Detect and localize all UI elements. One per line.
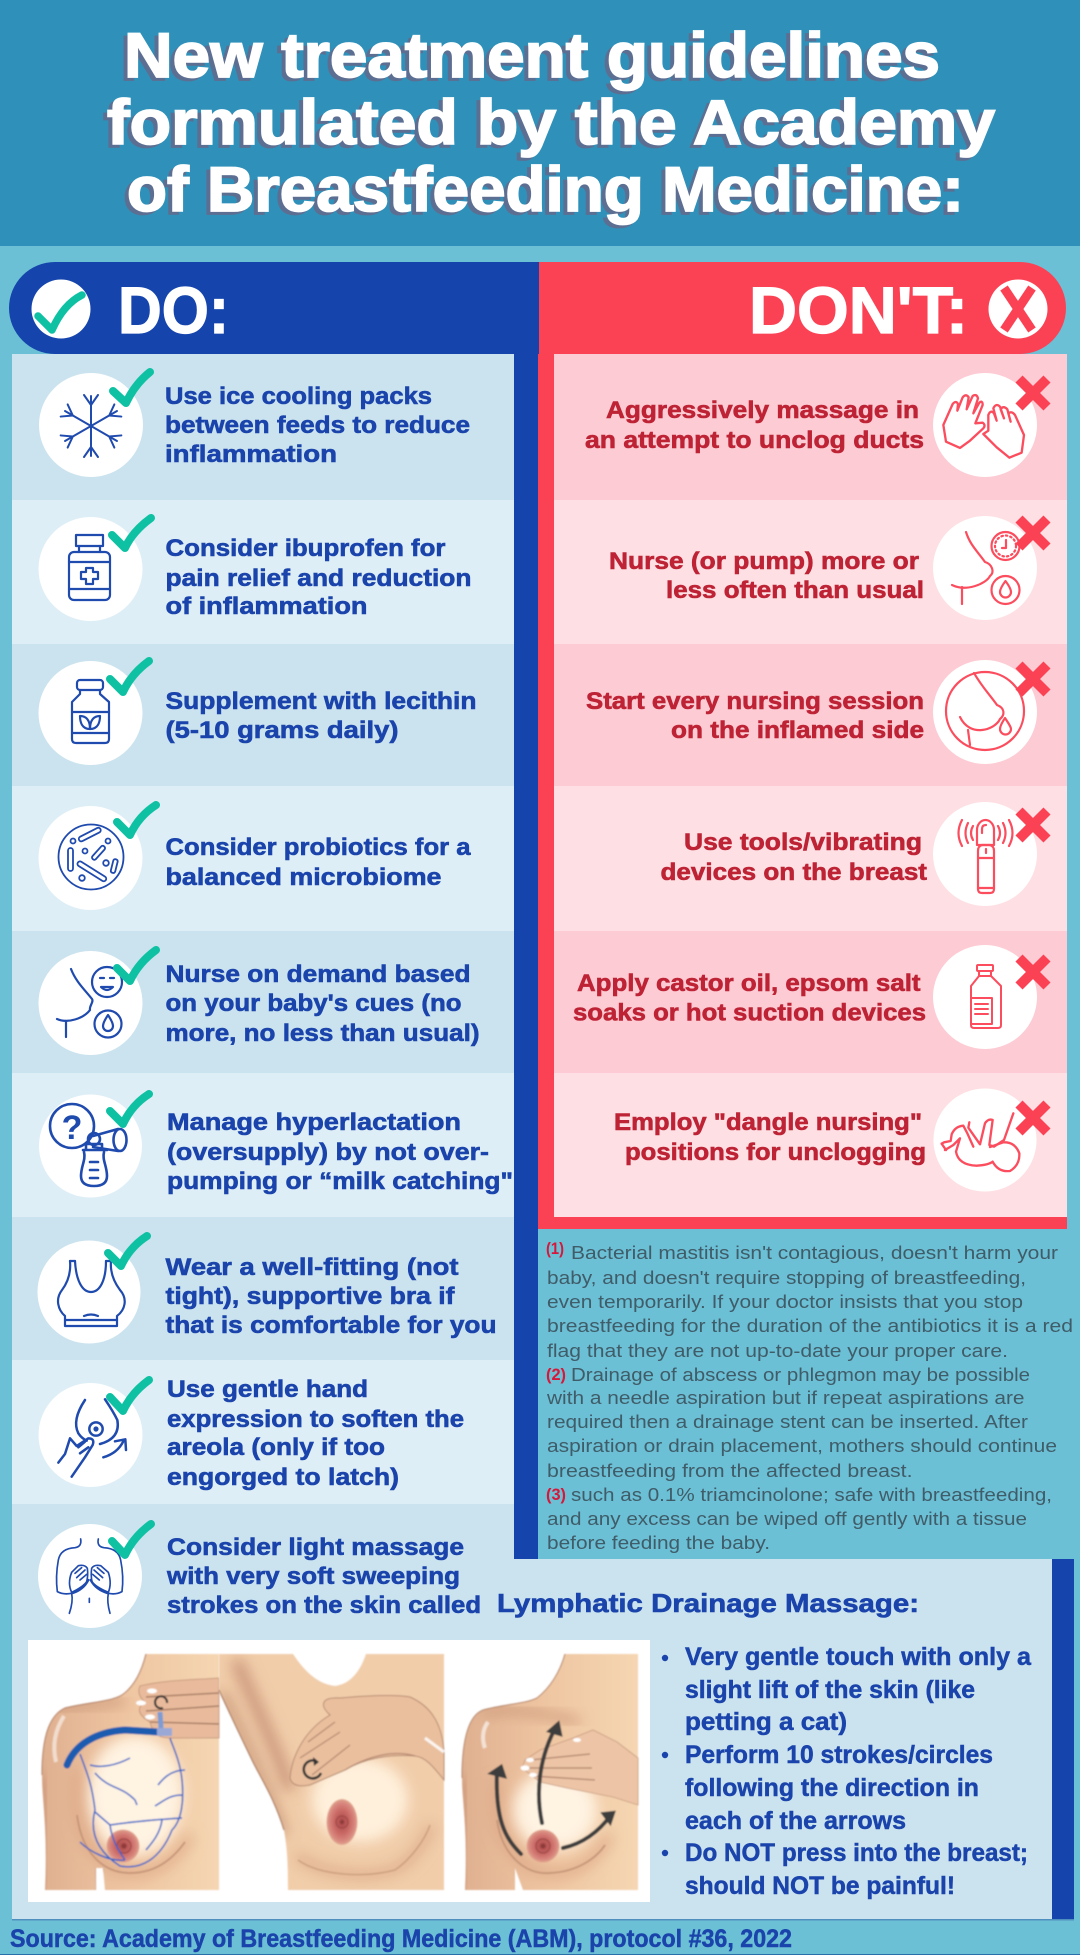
item text <box>166 535 472 620</box>
item text: inflammation <box>165 441 337 468</box>
heading: lymphatic drainage massage: Lymphatic Drainage Massage: <box>497 1588 919 1618</box>
item text: (oversupply) by not over- <box>167 1139 489 1166</box>
don't heading: DON'T: <box>749 273 968 347</box>
item text: devices on the breast <box>660 859 927 886</box>
item text <box>166 1254 496 1339</box>
footnotes: such as 0.1% triamcinolone; safe with breastfeeding, <box>571 1484 1052 1505</box>
item text: engorged to latch) <box>167 1464 399 1491</box>
item: probiotics <box>38 805 471 910</box>
panel: don't heading bar <box>539 262 1066 354</box>
footnotes: Drainage of abscess or phlegmon may be possible <box>571 1364 1030 1385</box>
illustration: third figure with stroke arrows <box>462 1654 638 1890</box>
item text: tight), supportive bra if <box>166 1283 456 1310</box>
item text: with very soft sweeping <box>166 1563 460 1590</box>
item: ice packs <box>39 372 470 477</box>
footnotes: and any excess can be wiped off gently with a tissue <box>547 1508 1027 1529</box>
item text: Aggressively massage in <box>606 397 919 424</box>
bullet list: Do NOT press into the breast; <box>685 1839 1028 1867</box>
x mark <box>1019 958 1047 986</box>
icon: vibrating wand <box>958 820 1012 893</box>
check mark <box>110 1380 149 1411</box>
item: supportive bra <box>38 1236 496 1344</box>
x mark <box>1019 379 1047 407</box>
check mark <box>110 661 149 692</box>
don't: castor oil <box>573 945 1047 1049</box>
illustration: first figure with lymph vessels <box>42 1654 219 1890</box>
footnotes: breastfeeding from the affected breast. <box>547 1460 912 1481</box>
item: lecithin <box>38 661 476 765</box>
x mark <box>1019 665 1047 693</box>
icon: nursing baby <box>57 967 122 1038</box>
header banner <box>0 0 1080 246</box>
icon: baby <box>942 1113 1019 1171</box>
item text: Manage hyperlactation <box>167 1109 461 1136</box>
footnotes: baby, and doesn't require stopping of breastfeeding, <box>547 1267 1026 1288</box>
icon: snowflake <box>61 395 121 457</box>
icon: question bubble and breast pump: ? <box>62 1109 82 1147</box>
item text <box>167 1376 464 1491</box>
x mark <box>1019 811 1047 839</box>
icon: hands <box>943 395 1024 458</box>
x mark <box>1019 1104 1047 1132</box>
bullet list: petting a cat) <box>685 1708 847 1736</box>
footnotes: (2) <box>546 1365 566 1384</box>
icon: petri dish microbes <box>58 824 124 890</box>
item text <box>166 961 480 1047</box>
illustration: massage technique <box>28 1640 650 1902</box>
item text: positions for unclogging <box>625 1139 926 1166</box>
item text <box>166 834 471 891</box>
check mark <box>110 1094 149 1124</box>
bullet list: following the direction in <box>685 1774 979 1802</box>
check mark <box>112 518 151 548</box>
icon: hand expression <box>58 1399 126 1477</box>
icon: medicine bottle <box>69 535 110 600</box>
panel: don't column <box>538 354 1067 1229</box>
bullet list: Perform 10 strokes/circles <box>685 1741 993 1769</box>
item text <box>166 688 476 744</box>
bullet list: should NOT be painful! <box>685 1872 955 1900</box>
don't: dangle nursing <box>614 1088 1047 1192</box>
don't: vibrating tools <box>660 802 1047 906</box>
footnotes: flag that they are not up-to-date your proper care. <box>547 1340 1008 1361</box>
footnotes: before feeding the baby. <box>547 1532 770 1553</box>
item text: Apply castor oil, epsom salt <box>577 970 921 997</box>
bullet list: each of the arrows <box>685 1807 906 1835</box>
item text: Consider light massage <box>167 1534 464 1561</box>
bullet list: slight lift of the skin (like <box>685 1676 975 1704</box>
icon: oil bottle <box>971 965 1001 1028</box>
don't: aggressive massage <box>585 373 1047 477</box>
bullet list: Very gentle touch with only a <box>685 1643 1032 1671</box>
icon: don't x badge <box>988 280 1048 338</box>
title: New treatment guidelines <box>124 21 940 91</box>
bullet list <box>662 1643 1032 1900</box>
footnotes: with a needle aspiration but if repeat aspirations are <box>546 1387 1024 1408</box>
item text: Nurse (or pump) more or <box>609 548 919 575</box>
don't: nurse more or less <box>609 516 1047 620</box>
item text <box>609 548 924 604</box>
icon: question bubble and breast pump <box>50 1104 126 1186</box>
item text: Use ice cooling packs <box>165 383 432 410</box>
item text: Wear a well-fitting (not <box>166 1254 459 1281</box>
item text: Consider ibuprofen for <box>166 535 446 562</box>
item text: Use tools/vibrating <box>684 829 922 856</box>
icon: breast with clock and drop <box>952 532 1020 604</box>
item: ibuprofen <box>38 517 472 621</box>
item text <box>586 688 924 744</box>
title <box>107 21 995 225</box>
item text: balanced microbiome <box>166 864 442 891</box>
icon: supplement bottle <box>72 680 109 743</box>
item text <box>614 1109 926 1166</box>
x mark <box>1019 519 1047 547</box>
footnotes: breastfeeding for the duration of the antibiotics it is a red <box>547 1315 1073 1336</box>
check mark <box>117 950 156 981</box>
item text: areola (only if too <box>167 1434 385 1461</box>
item text <box>573 970 926 1026</box>
icon: breast in circle <box>946 672 1024 750</box>
illustration: second figure circling under arm <box>219 1654 444 1890</box>
source line: Source: Academy of Breastfeeding Medicine (ABM), protocol #36, 2022 <box>10 1925 792 1953</box>
do heading: DO: <box>118 273 229 347</box>
panel: do heading bar <box>9 262 539 354</box>
panel: do column <box>12 354 538 1560</box>
item text: Nurse on demand based <box>166 961 470 988</box>
item text: an attempt to unclog ducts <box>585 427 924 454</box>
panel: lymphatic drainage massage <box>12 1559 1074 1920</box>
item text: less often than usual <box>666 577 924 604</box>
item text: pumping or “milk catching" <box>167 1168 513 1195</box>
item text: Employ "dangle nursing" <box>614 1109 922 1136</box>
footnotes: even temporarily. If your doctor insists that you stop <box>547 1291 1023 1312</box>
icon: torso with hands <box>57 1539 123 1613</box>
check mark <box>113 372 150 403</box>
item text <box>166 1534 481 1619</box>
title: of Breastfeeding Medicine: <box>127 155 964 225</box>
footnotes: (1) <box>546 1239 564 1258</box>
item text: between feeds to reduce <box>165 412 470 439</box>
item text: on the inflamed side <box>671 717 924 744</box>
item text: expression to soften the <box>167 1406 464 1433</box>
check mark <box>108 1236 147 1266</box>
title: formulated by the Academy <box>107 88 995 158</box>
item text: of inflammation <box>166 593 368 620</box>
item text: that is comfortable for you <box>166 1312 496 1339</box>
check mark <box>117 805 156 835</box>
footnotes: (3) <box>546 1485 566 1504</box>
footnotes <box>546 1239 1073 1553</box>
item text: Supplement with lecithin <box>166 688 476 715</box>
item text <box>585 397 924 454</box>
footnotes: required then a drainage stent can be inserted. After <box>547 1411 1028 1432</box>
item text: (5-10 grams daily) <box>166 717 398 744</box>
item: nurse on demand <box>38 950 480 1055</box>
item text: on your baby's cues (no <box>166 990 462 1017</box>
item text: Start every nursing session <box>586 688 924 715</box>
footnotes: Bacterial mastitis isn't contagious, doesn't harm your <box>571 1242 1058 1263</box>
icon: bra <box>58 1261 125 1326</box>
item text: more, no less than usual) <box>166 1020 480 1047</box>
footnotes: aspiration or drain placement, mothers should continue <box>547 1435 1057 1456</box>
item text: pain relief and reduction <box>166 565 472 592</box>
item: light massage <box>38 1524 481 1628</box>
item text: soaks or hot suction devices <box>573 1000 926 1026</box>
item text <box>167 1109 513 1195</box>
item text <box>660 829 927 886</box>
item: hyperlactation <box>39 1094 513 1198</box>
item text <box>165 383 470 468</box>
icon: do check badge <box>32 280 90 338</box>
item: hand expression <box>38 1376 464 1491</box>
item text: strokes on the skin called <box>167 1592 481 1619</box>
check mark <box>112 1524 151 1555</box>
don't: inflamed side <box>586 660 1047 764</box>
item text: Consider probiotics for a <box>166 834 471 861</box>
item text: Use gentle hand <box>167 1376 368 1403</box>
arrow: stroke paths <box>492 1724 613 1854</box>
